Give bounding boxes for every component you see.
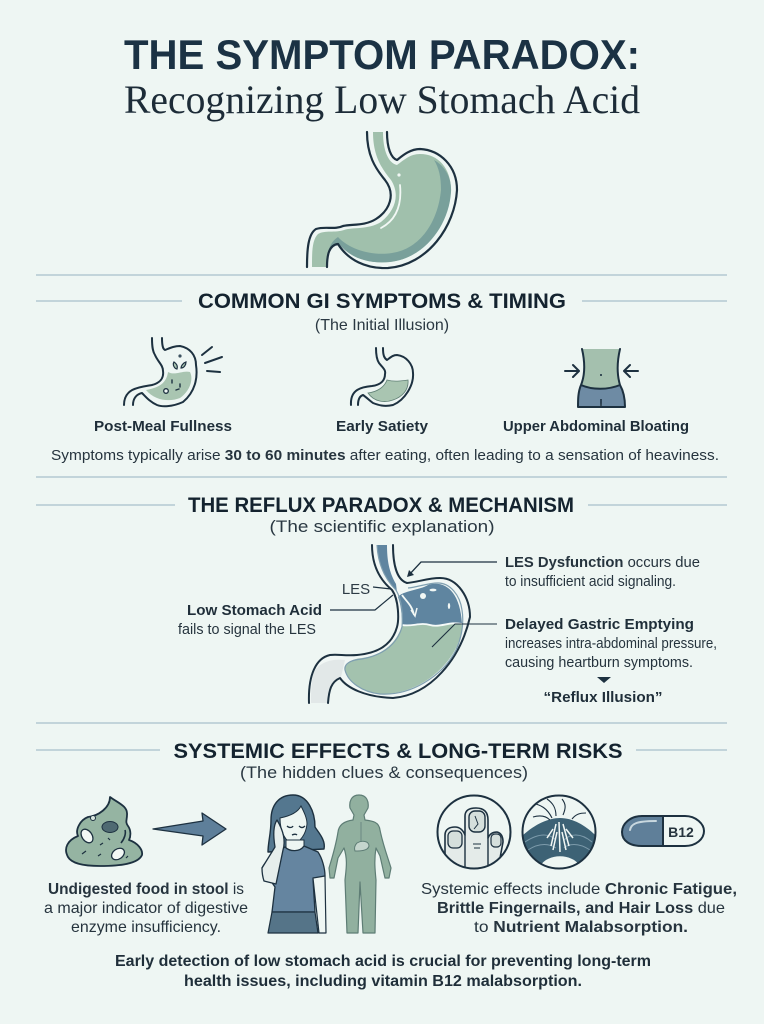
- text: systemic effects: Brittle Fingernails, and Hair Loss due: [437, 900, 725, 917]
- text: conclusion: health issues, including vitamin B12 malabsorption.: [184, 973, 582, 990]
- heading: common GI symptoms: [198, 290, 566, 334]
- title: Recognizing Low Stomach Acid: [124, 77, 640, 122]
- icon: B12 capsule: B12: [668, 824, 694, 840]
- icon: early satiety stomach: [351, 348, 413, 406]
- icon: main stomach: [307, 132, 457, 268]
- diagram: reflux stomach: [309, 545, 470, 703]
- text: undigested food: [44, 881, 248, 936]
- reflux illusion label: “Reflux Illusion”: [544, 689, 662, 706]
- heading: common GI symptoms: (The Initial Illusion): [315, 317, 449, 334]
- text: undigested food: enzyme insufficiency.: [71, 919, 221, 936]
- text: symptom timing: Symptoms typically arise 30 to 60 minutes after eating, often leading to a sensation of heaviness.: [51, 448, 719, 464]
- icon: abdominal bloating torso: [565, 349, 638, 407]
- heading: systemic effects: [174, 740, 622, 782]
- label: early satiety: Early Satiety: [336, 418, 429, 435]
- heading: systemic effects: SYSTEMIC EFFECTS & LONG-TERM RISKS: [174, 740, 622, 763]
- title: THE SYMPTOM PARADOX:: [124, 31, 640, 78]
- text: conclusion: [115, 953, 651, 990]
- heading: reflux paradox: (The scientific explanation): [270, 518, 494, 536]
- reflux illusion label: [544, 677, 662, 706]
- icon: hair loss: [520, 796, 598, 870]
- heading: common GI symptoms: COMMON GI SYMPTOMS & TIMING: [198, 290, 566, 313]
- callout: delayed gastric emptying: causing heartburn symptoms.: [505, 655, 693, 671]
- icon: B12 capsule: [622, 816, 704, 846]
- divider lines: [36, 275, 727, 750]
- callout: LES label: LES: [342, 581, 370, 598]
- heading: reflux paradox: THE REFLUX PARADOX & MECHANISM: [188, 494, 574, 517]
- text: undigested food: Undigested food in stool is: [48, 881, 244, 898]
- callout: LES dysfunction: [407, 555, 700, 590]
- icon: post-meal fullness stomach: [124, 338, 222, 406]
- icon: stool: [66, 797, 142, 866]
- callout: low stomach acid: Low Stomach Acid: [187, 602, 322, 619]
- label: post-meal fullness: Post-Meal Fullness: [94, 418, 232, 435]
- callout: delayed gastric emptying: Delayed Gastric Emptying: [505, 616, 694, 633]
- callout: low stomach acid: fails to signal the LES: [178, 622, 316, 638]
- heading: systemic effects: (The hidden clues & consequences): [240, 764, 528, 782]
- icon: brittle fingernails: [438, 796, 510, 880]
- heading: reflux paradox: [188, 494, 574, 536]
- text: systemic effects: Systemic effects include Chronic Fatigue,: [421, 881, 737, 898]
- callout: low stomach acid: [178, 595, 393, 638]
- callout: LES dysfunction: LES Dysfunction occurs due: [505, 555, 700, 571]
- text: systemic effects: to Nutrient Malabsorption.: [474, 919, 688, 936]
- callout: LES dysfunction: to insufficient acid signaling.: [505, 574, 676, 590]
- text: systemic effects: [421, 881, 737, 936]
- callout: delayed gastric emptying: [432, 616, 717, 671]
- icon: body silhouette: [329, 795, 391, 933]
- title: [124, 31, 640, 122]
- arrow: stool to person: [153, 813, 226, 845]
- text: undigested food: a major indicator of digestive: [44, 900, 248, 917]
- text: conclusion: Early detection of low stomach acid is crucial for preventing long-term: [115, 953, 651, 970]
- callout: LES label: [342, 581, 391, 598]
- callout: delayed gastric emptying: increases intra-abdominal pressure,: [505, 636, 717, 652]
- label: upper abdominal bloating: Upper Abdominal Bloating: [503, 418, 689, 435]
- icon: fatigued woman: [262, 795, 326, 933]
